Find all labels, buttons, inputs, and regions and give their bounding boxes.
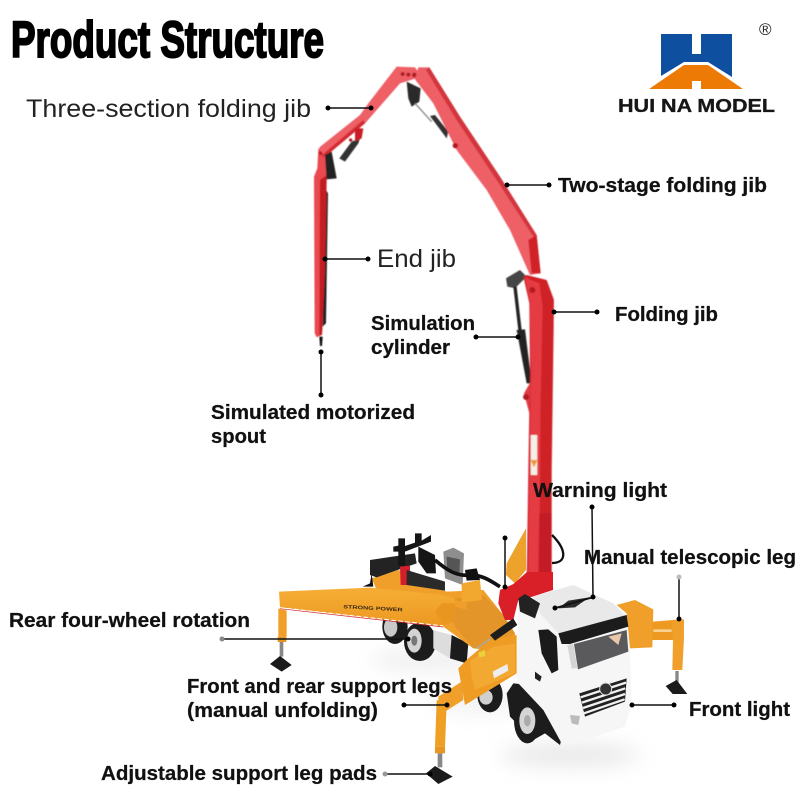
yellow arm behind column <box>506 528 526 583</box>
rear machinery <box>363 533 500 591</box>
side tank <box>433 630 468 663</box>
label: two-stage folding jib: Two-stage folding jib <box>558 175 767 197</box>
label: warning light: Warning light <box>533 480 667 502</box>
registered mark: ® <box>759 20 772 39</box>
right front outrigger <box>617 600 687 694</box>
leader: rear four-wheel rotation <box>220 636 410 642</box>
label: rear four-wheel rotation: Rear four-wheel rotation <box>9 610 250 632</box>
column base flange <box>510 572 553 600</box>
logo: Hui Na Model <box>618 20 775 116</box>
three-section folding jib <box>319 67 422 179</box>
label: manual telescopic leg: Manual telescopic leg <box>584 547 796 569</box>
leader: support legs <box>402 702 450 708</box>
label: simulation cylinder: cylinder <box>371 337 450 359</box>
label: front and rear support legs <box>187 676 452 722</box>
two-stage folding jib <box>407 67 541 330</box>
logo wordmark: HUI NA MODEL <box>618 96 775 116</box>
label: adjustable support leg pads: Adjustable support leg pads <box>101 763 377 785</box>
end jib <box>314 148 328 346</box>
rear hydraulic cylinder <box>477 618 517 648</box>
label: folding jib: Folding jib <box>615 304 718 326</box>
rear deck <box>372 570 515 653</box>
label: three-section folding jib: Three-section folding jib <box>26 95 311 123</box>
folding jib and column <box>517 275 554 580</box>
title: Product Structure <box>11 11 324 68</box>
label: simulation cylinder: Simulation <box>371 313 475 335</box>
red turret <box>498 578 530 620</box>
label: front and rear support legs: Front and rear support legs <box>187 676 452 698</box>
truck cab section <box>507 585 687 745</box>
leader: warning light <box>552 504 596 610</box>
truck rear section <box>270 528 530 672</box>
pivot mount <box>445 580 515 648</box>
leader: two-stage jib <box>504 182 552 188</box>
leader lines <box>220 106 682 776</box>
front left leg <box>426 682 463 784</box>
label: front light: Front light <box>689 699 790 721</box>
front left outrigger box <box>458 635 517 705</box>
leader: manual telescopic leg <box>676 574 682 622</box>
logo mark: blue H <box>661 34 732 77</box>
label: end jib: End jib <box>377 245 456 273</box>
leader: column rotation <box>502 536 508 590</box>
label: simulated motorized spout: spout <box>211 426 266 448</box>
truck middle and left outrigger <box>426 635 517 784</box>
hydraulic cable <box>552 535 563 563</box>
label: simulation cylinder <box>371 313 475 359</box>
truck cab <box>517 585 632 745</box>
rear wheels <box>382 609 436 661</box>
ground shadows <box>370 650 640 766</box>
hidden mid wheel <box>477 678 503 712</box>
leader: front light <box>630 702 676 708</box>
logo mark: orange roof <box>649 65 743 89</box>
strong power lettering: STRONG POWER <box>343 604 403 613</box>
label: front and rear support legs: (manual unfolding) <box>187 700 378 722</box>
label: simulated motorized spout <box>211 402 415 448</box>
leader: simulation cylinder <box>474 334 520 340</box>
leader: folding jib <box>552 310 600 314</box>
leader: three-section jib <box>326 106 374 110</box>
label: simulated motorized spout: Simulated motorized <box>211 402 415 424</box>
leader: motorized spout <box>318 350 324 398</box>
concrete pump boom <box>314 67 554 580</box>
rear support beam <box>270 588 455 672</box>
front wheel <box>507 683 562 745</box>
leader: leg pads <box>382 772 432 776</box>
leader: end jib <box>322 256 370 262</box>
